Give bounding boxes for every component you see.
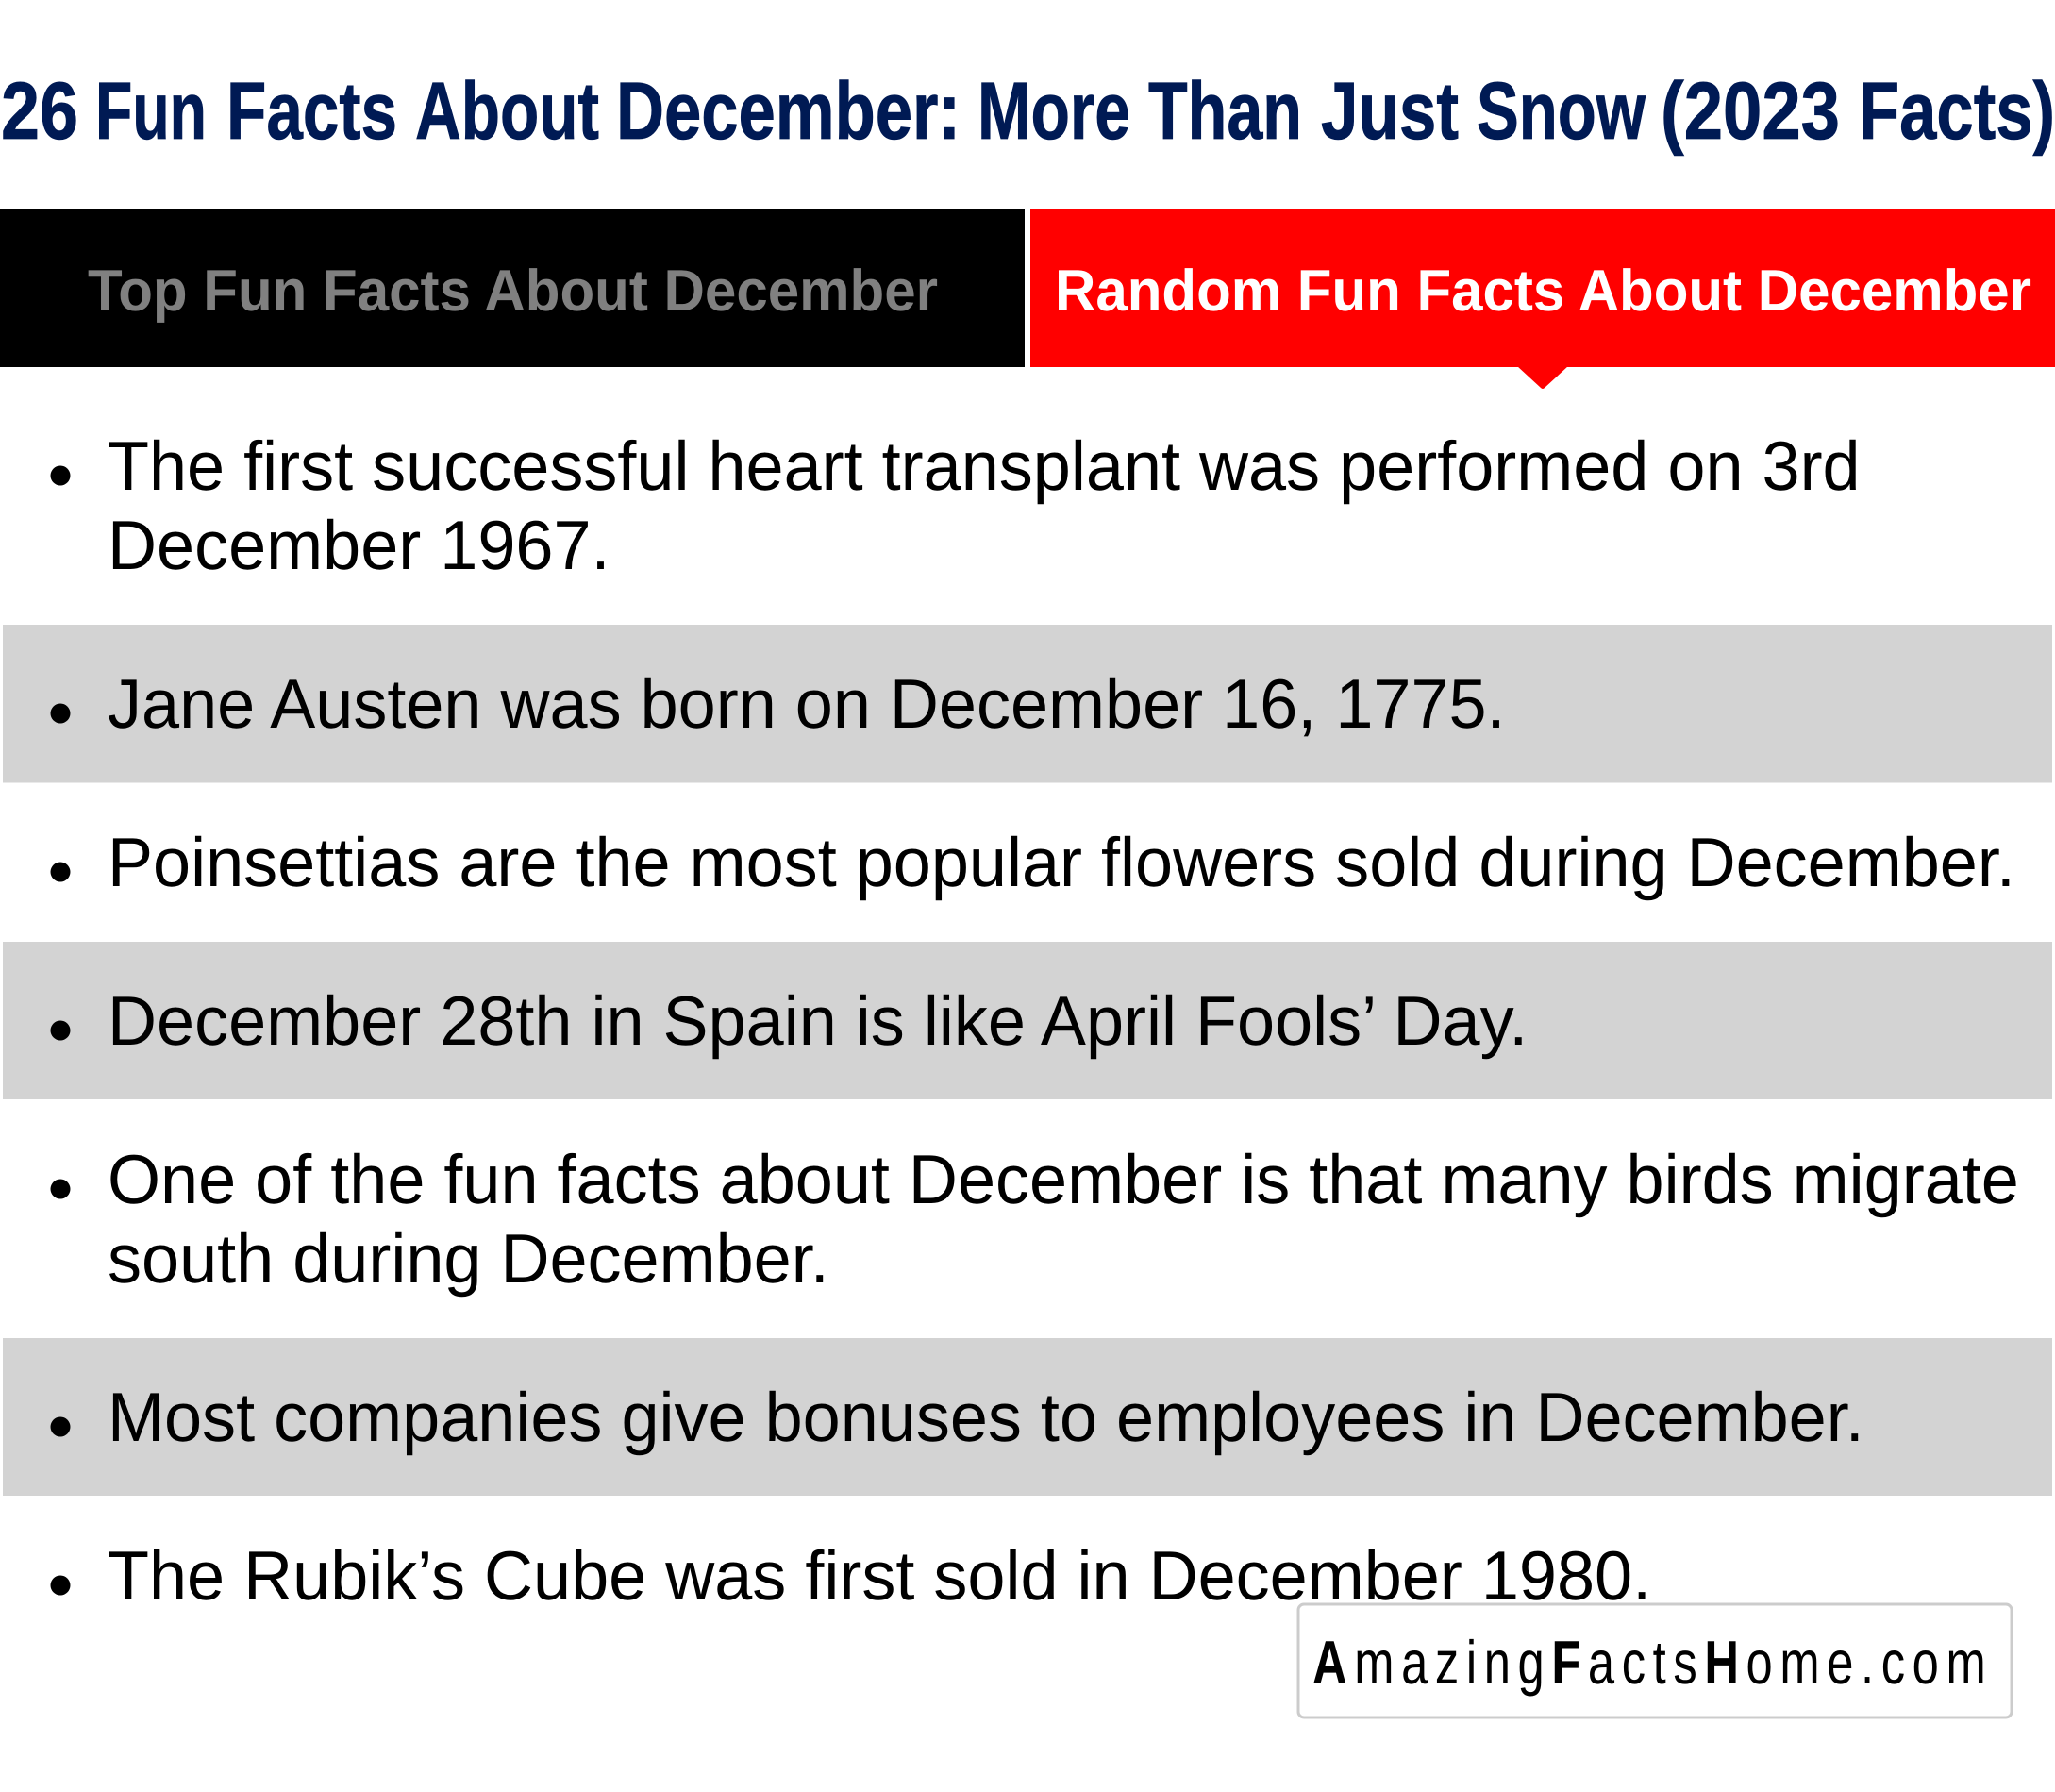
fact 5 [51,1140,2019,1298]
watermark badge [1298,1604,2012,1717]
title: Fun [95,66,207,157]
fact 2 row: Jane Austen was born on December 16, 1775. [108,664,1506,743]
fact 4 row: December 28th in Spain is like April Fools’ Day. [108,981,1528,1060]
title: Snow [1477,66,1646,157]
tab: random fun facts (active): Random Fun Facts About December [1055,259,2031,324]
fact 2 row [3,625,2052,783]
fact 5: One of the fun facts about December is that many birds migrate [108,1140,2019,1218]
title: More [977,66,1130,157]
fact 5: south during December. [108,1219,829,1298]
watermark badge: AmazingFactsHome.com [1312,1628,1986,1697]
fact 6 row: Most companies give bonuses to employees in December. [108,1378,1864,1456]
fact 3: Poinsettias are the most popular flowers sold during December. [108,823,2015,901]
tab: top fun facts (inactive) [0,209,1025,367]
fact 1 [51,427,1861,584]
fact 7: The Rubik’s Cube was first sold in December 1980. [108,1536,1651,1615]
title: Just [1321,66,1459,157]
fact 1: December 1967. [108,506,610,584]
title [1,66,2055,157]
fact 4 row [3,942,2052,1099]
fact 1: The first successful heart transplant was performed on 3rd [108,427,1861,505]
tab: random fun facts (active) [1030,209,2055,389]
title: Facts [226,66,397,157]
fact 6 row [3,1338,2052,1496]
title: Than [1148,66,1302,157]
title: (2023 [1661,66,1840,157]
title: 26 [1,66,78,157]
tab: top fun facts (inactive): Top Fun Facts About December [88,259,938,324]
title: December: [616,66,961,157]
title: About [415,66,599,157]
